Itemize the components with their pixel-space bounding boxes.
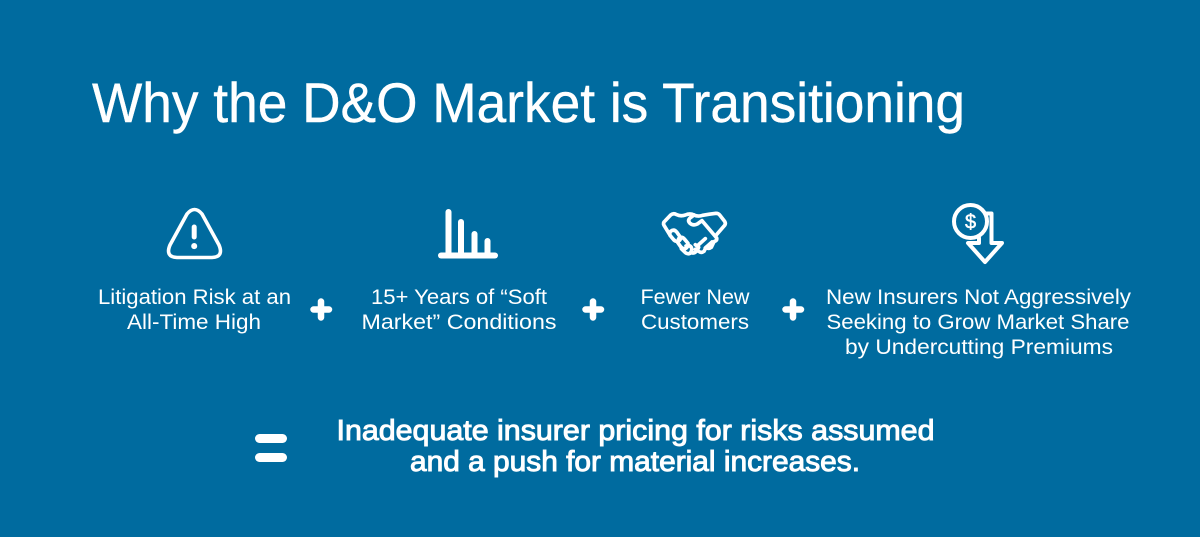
icon: dollar coin with down arrow [954, 205, 1002, 262]
text: fewer customers: Customers [641, 310, 749, 334]
text: new insurers: Seeking to Grow Market Share [826, 310, 1130, 334]
icon: equals sign [255, 434, 287, 462]
text: soft market: Market” Conditions [362, 310, 556, 334]
icon: dollar coin with down arrow: $ [965, 212, 976, 234]
title: Why the D&O Market is Transitioning [92, 71, 965, 134]
icon: bar chart [441, 212, 495, 256]
text: new insurers: New Insurers Not Aggressively [826, 285, 1131, 309]
icon: plus 3 [786, 302, 801, 318]
text: litigation risk: Litigation Risk at an [98, 285, 291, 309]
icon: plus 1 [314, 302, 329, 318]
text: fewer customers: Fewer New [640, 285, 750, 309]
icon: handshake [664, 213, 725, 254]
icon: plus 2 [586, 302, 601, 318]
text: soft market: 15+ Years of “Soft [371, 285, 547, 309]
text: litigation risk: All-Time High [127, 310, 261, 334]
result statement: and a push for material increases. [410, 446, 860, 478]
text: new insurers: by Undercutting Premiums [845, 335, 1113, 359]
result statement: Inadequate insurer pricing for risks assumed [336, 415, 934, 447]
icon: warning triangle [169, 210, 220, 258]
